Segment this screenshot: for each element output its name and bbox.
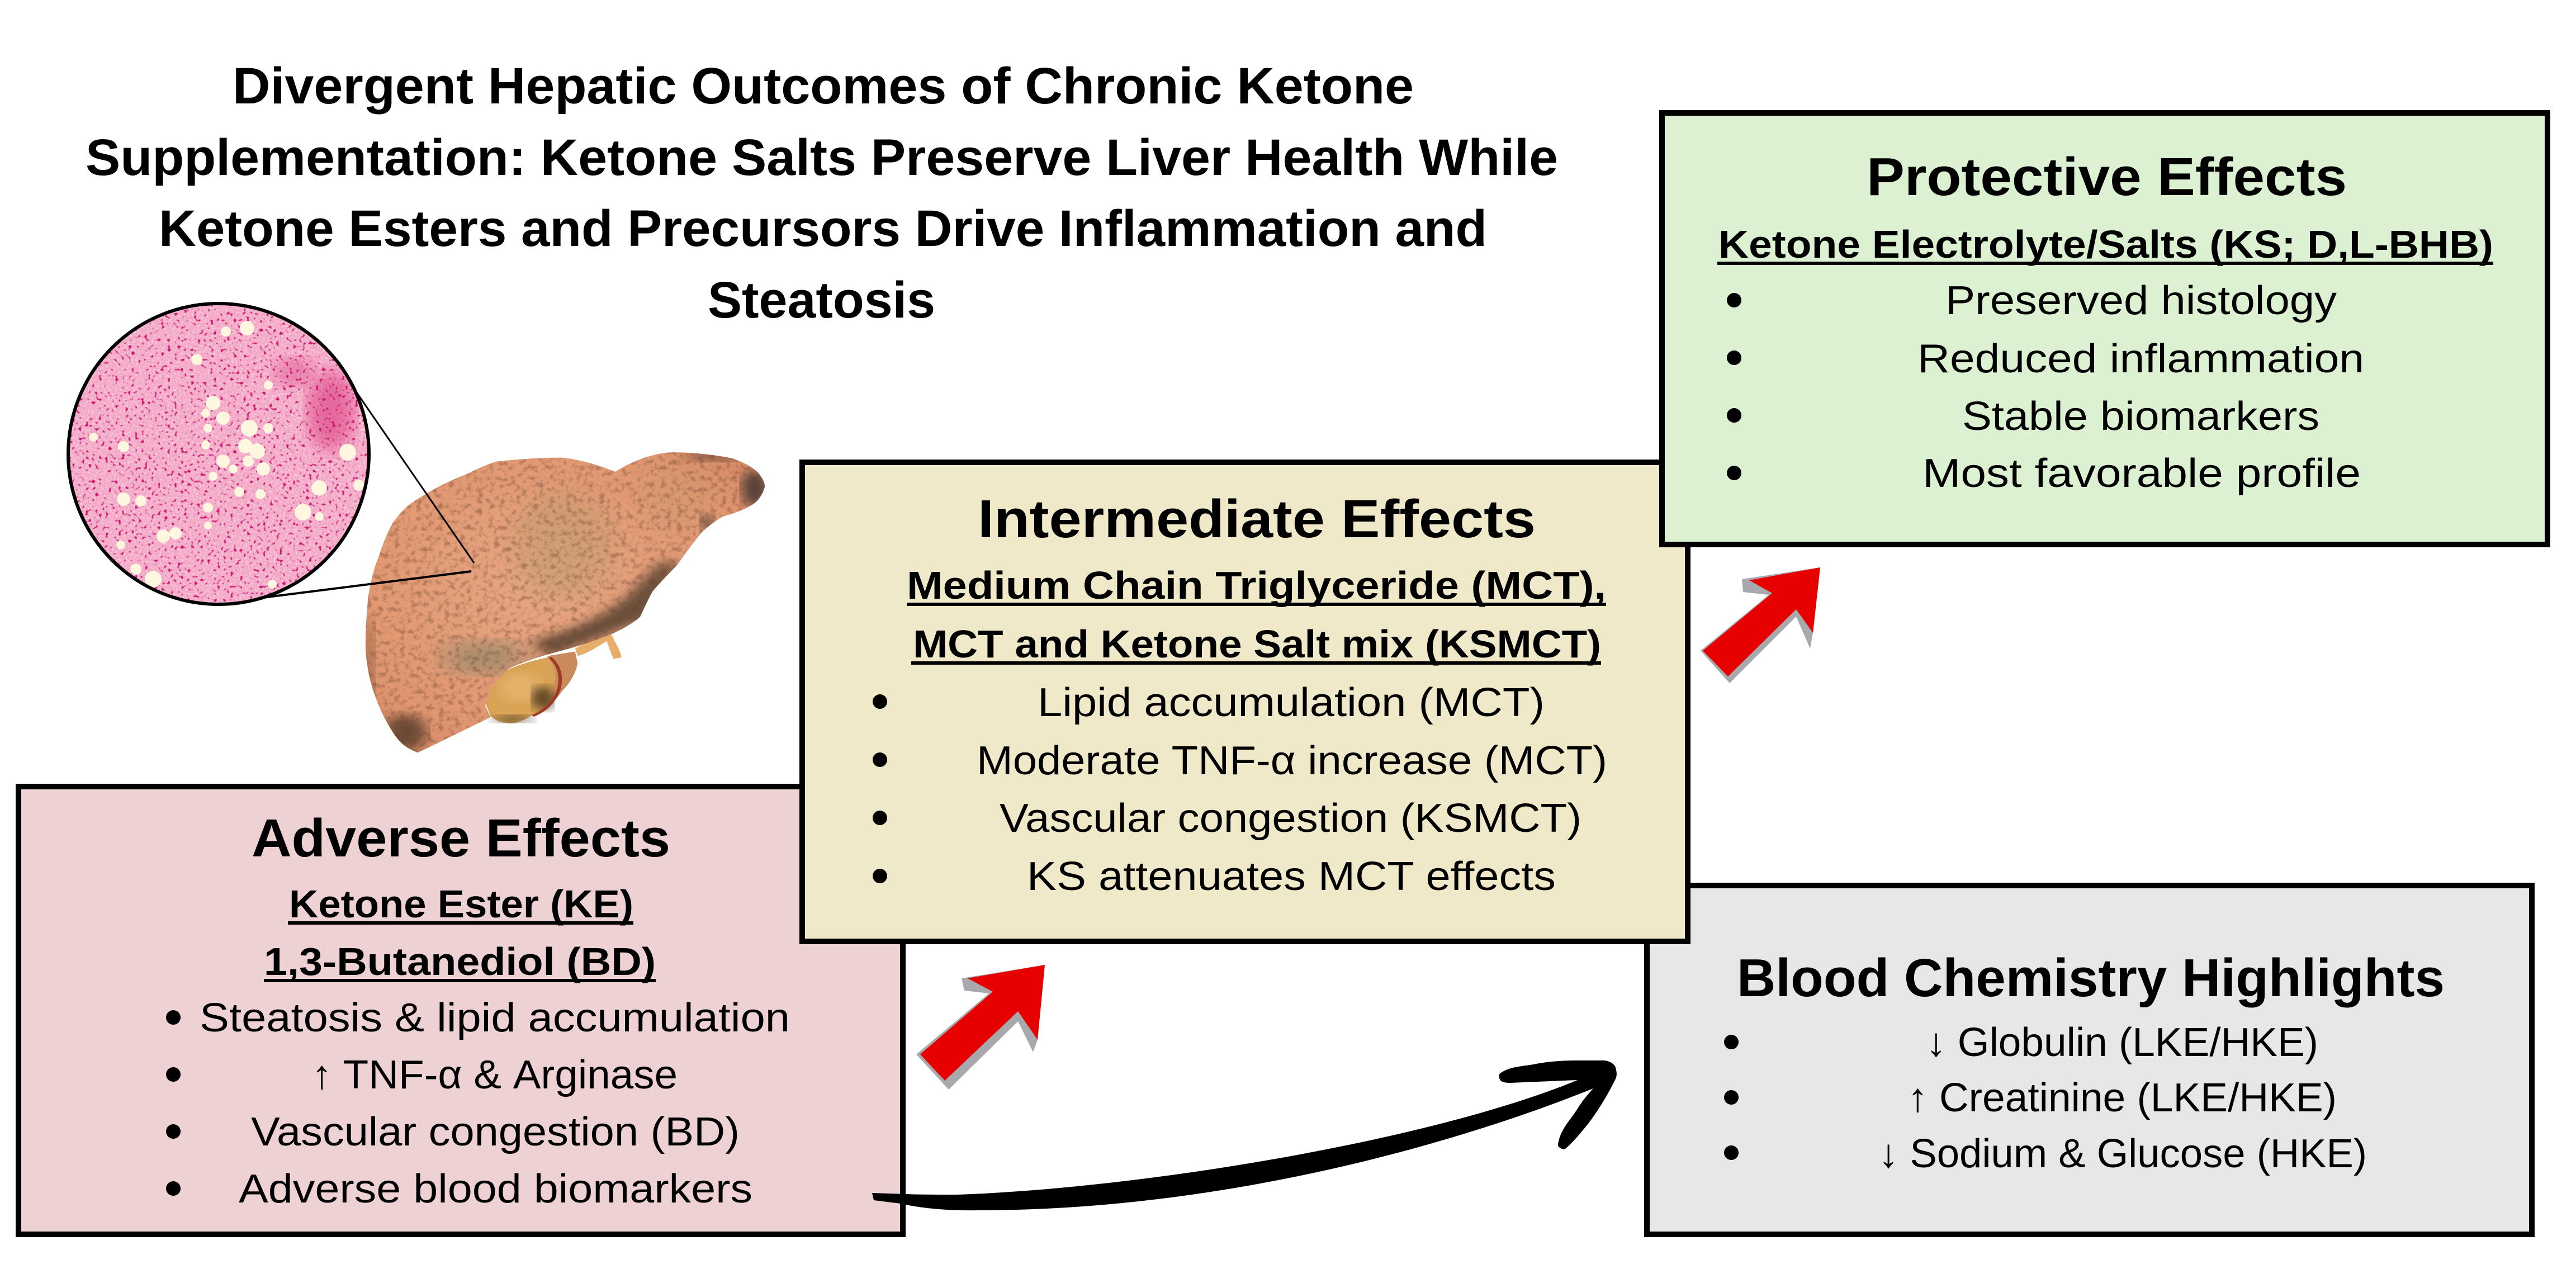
arrow: intermediate to protective xyxy=(1701,567,1820,683)
panel: protective effects: Preserved histology xyxy=(1945,278,2337,323)
panel: intermediate effects: Intermediate Effects xyxy=(978,489,1536,549)
panel: protective effects xyxy=(1662,113,2547,544)
panel: intermediate effects: Lipid accumulation (MCT) xyxy=(1038,680,1545,725)
panel: intermediate effects: Medium Chain Triglyceride (MCT), xyxy=(907,564,1606,607)
panel: adverse effects: ↑ TNF-α & Arginase xyxy=(311,1053,678,1097)
panel: blood chemistry highlights: ↓ Sodium & Glucose (HKE) xyxy=(1878,1131,2367,1176)
panel: protective effects: Most favorable profile xyxy=(1922,451,2361,496)
panel: blood chemistry highlights: Blood Chemistry Highlights xyxy=(1737,948,2445,1008)
image: histology circle xyxy=(67,302,372,607)
panel: blood chemistry highlights: ↑ Creatinine (LKE/HKE) xyxy=(1907,1076,2337,1120)
callout lines from histology circle to liver xyxy=(258,394,474,598)
panel: intermediate effects: KS attenuates MCT effects xyxy=(1027,854,1556,899)
title xyxy=(86,58,1558,329)
panel: blood chemistry highlights xyxy=(1647,886,2532,1234)
panel: protective effects: Stable biomarkers xyxy=(1962,394,2319,439)
panel: adverse effects: Ketone Ester (KE) xyxy=(289,882,633,926)
arrow: curved black arrow to blood chemistry xyxy=(872,1060,1617,1210)
arrow: adverse to intermediate xyxy=(916,965,1045,1090)
panel: adverse effects: Adverse blood biomarkers xyxy=(239,1167,752,1211)
title: Supplementation: Ketone Salts Preserve Liver Health While xyxy=(86,129,1558,186)
panel: intermediate effects: Vascular congestion (KSMCT) xyxy=(1000,796,1581,841)
panel: adverse effects: 1,3-Butanediol (BD) xyxy=(264,940,656,983)
panel: protective effects: Protective Effects xyxy=(1867,147,2347,207)
panel: protective effects: Ketone Electrolyte/Salts (KS; D,L-BHB) xyxy=(1718,222,2493,266)
title: Divergent Hepatic Outcomes of Chronic Ketone xyxy=(233,58,1414,115)
panel: adverse effects: Vascular congestion (BD) xyxy=(251,1110,740,1154)
panel: adverse effects: Adverse Effects xyxy=(252,808,670,868)
panel: blood chemistry highlights: ↓ Globulin (LKE/HKE) xyxy=(1926,1020,2318,1065)
panel: adverse effects: Steatosis & lipid accumulation xyxy=(200,996,790,1040)
panel: adverse effects xyxy=(18,787,903,1234)
title: Steatosis xyxy=(708,272,935,329)
panel: intermediate effects: MCT and Ketone Salt mix (KSMCT) xyxy=(913,622,1601,666)
panel: intermediate effects: Moderate TNF-α increase (MCT) xyxy=(977,738,1607,783)
icon: liver illustration xyxy=(358,448,772,756)
panel: protective effects: Reduced inflammation xyxy=(1917,337,2364,381)
title: Ketone Esters and Precursors Drive Inflammation and xyxy=(159,200,1487,257)
panel: intermediate effects xyxy=(802,462,1688,941)
